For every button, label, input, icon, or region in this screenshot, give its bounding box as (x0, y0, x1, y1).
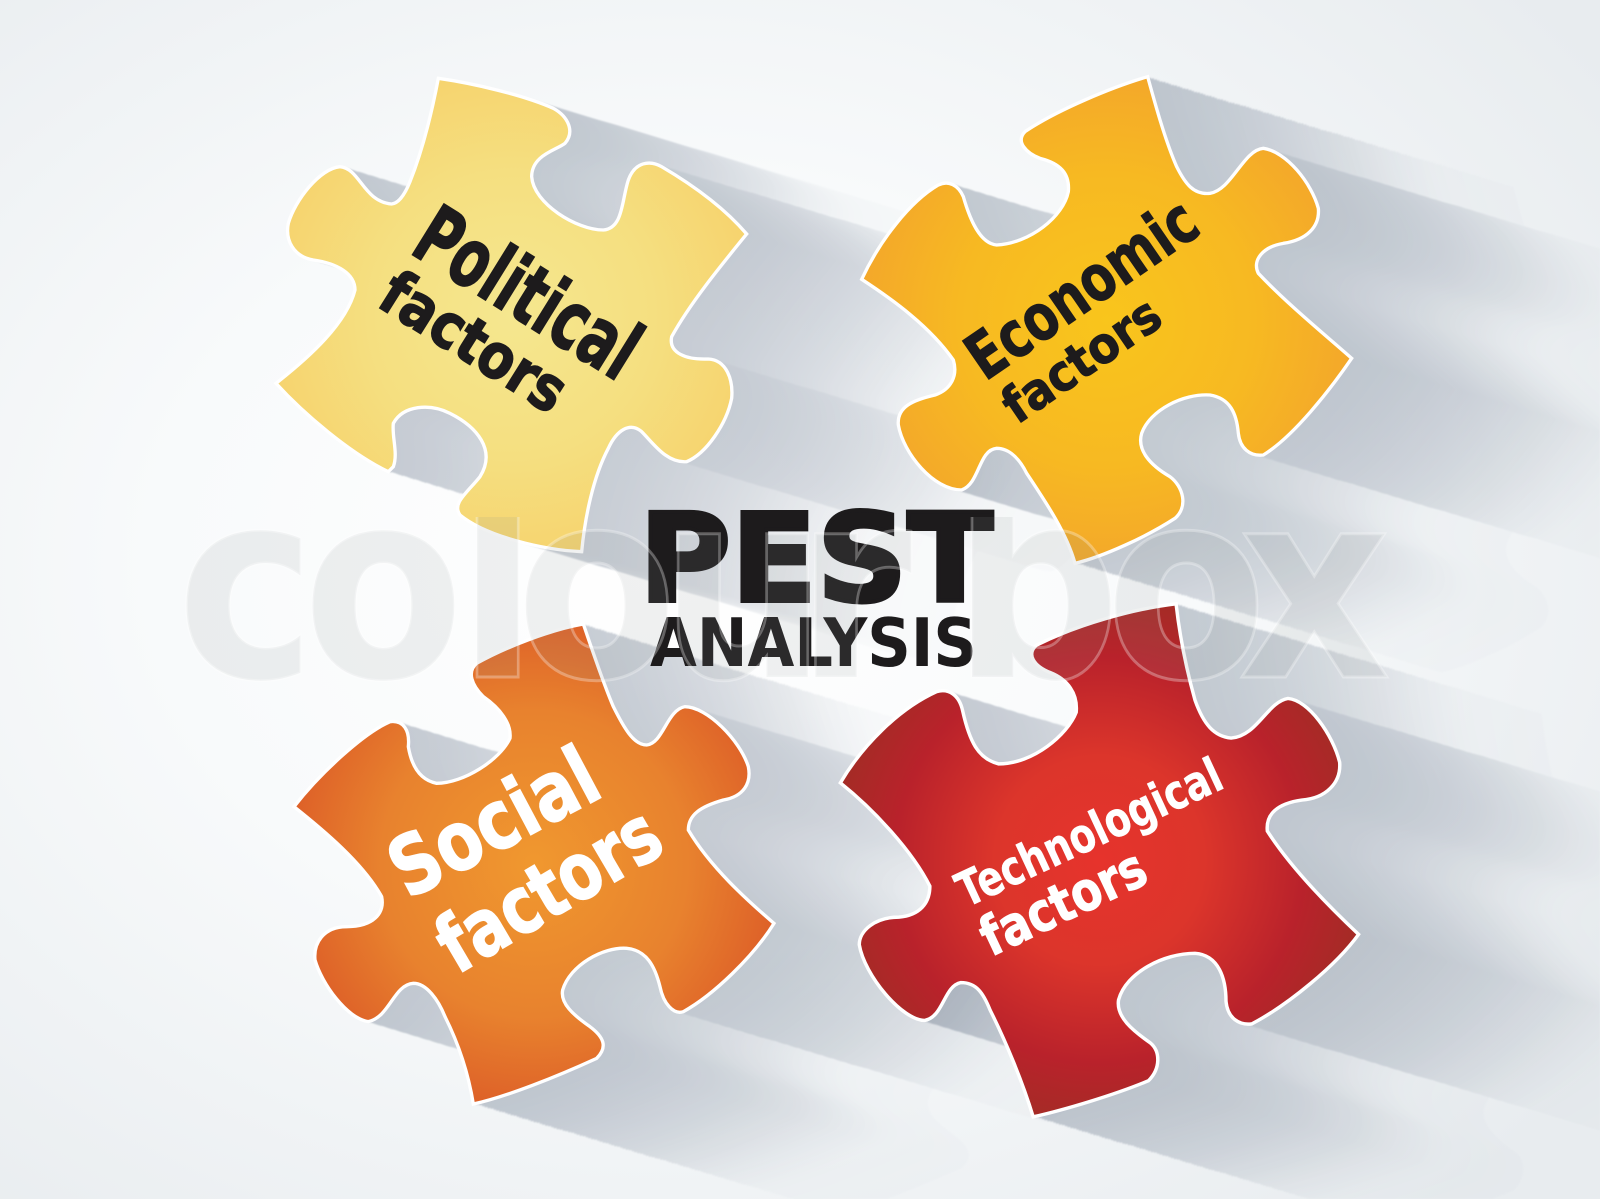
label: political factors: factors (367, 256, 581, 428)
panel: political factors puzzle piece (276, 78, 747, 552)
label: economic factors: factors (991, 285, 1172, 435)
label: economic: Economic (952, 184, 1212, 395)
long shadow: economic piece (862, 77, 1352, 563)
long shadow: technological piece (840, 604, 1359, 1117)
label: social factors: factors (420, 788, 678, 991)
long shadow: social piece (294, 624, 774, 1104)
panel: economic factors puzzle piece (862, 77, 1352, 563)
panel: social factors puzzle piece (294, 624, 774, 1104)
label: technological factors: factors (970, 836, 1157, 969)
label: technological: Technological (947, 747, 1231, 919)
watermark: colourbox (176, 434, 1390, 739)
title: PEST: PEST (639, 488, 993, 630)
subtitle: ANALYSIS: ANALYSIS (650, 604, 977, 682)
panel: technological factors puzzle piece (840, 604, 1359, 1117)
label: political: Political (397, 188, 657, 399)
long shadow: political piece (276, 78, 747, 552)
label: social: Social (373, 729, 615, 918)
